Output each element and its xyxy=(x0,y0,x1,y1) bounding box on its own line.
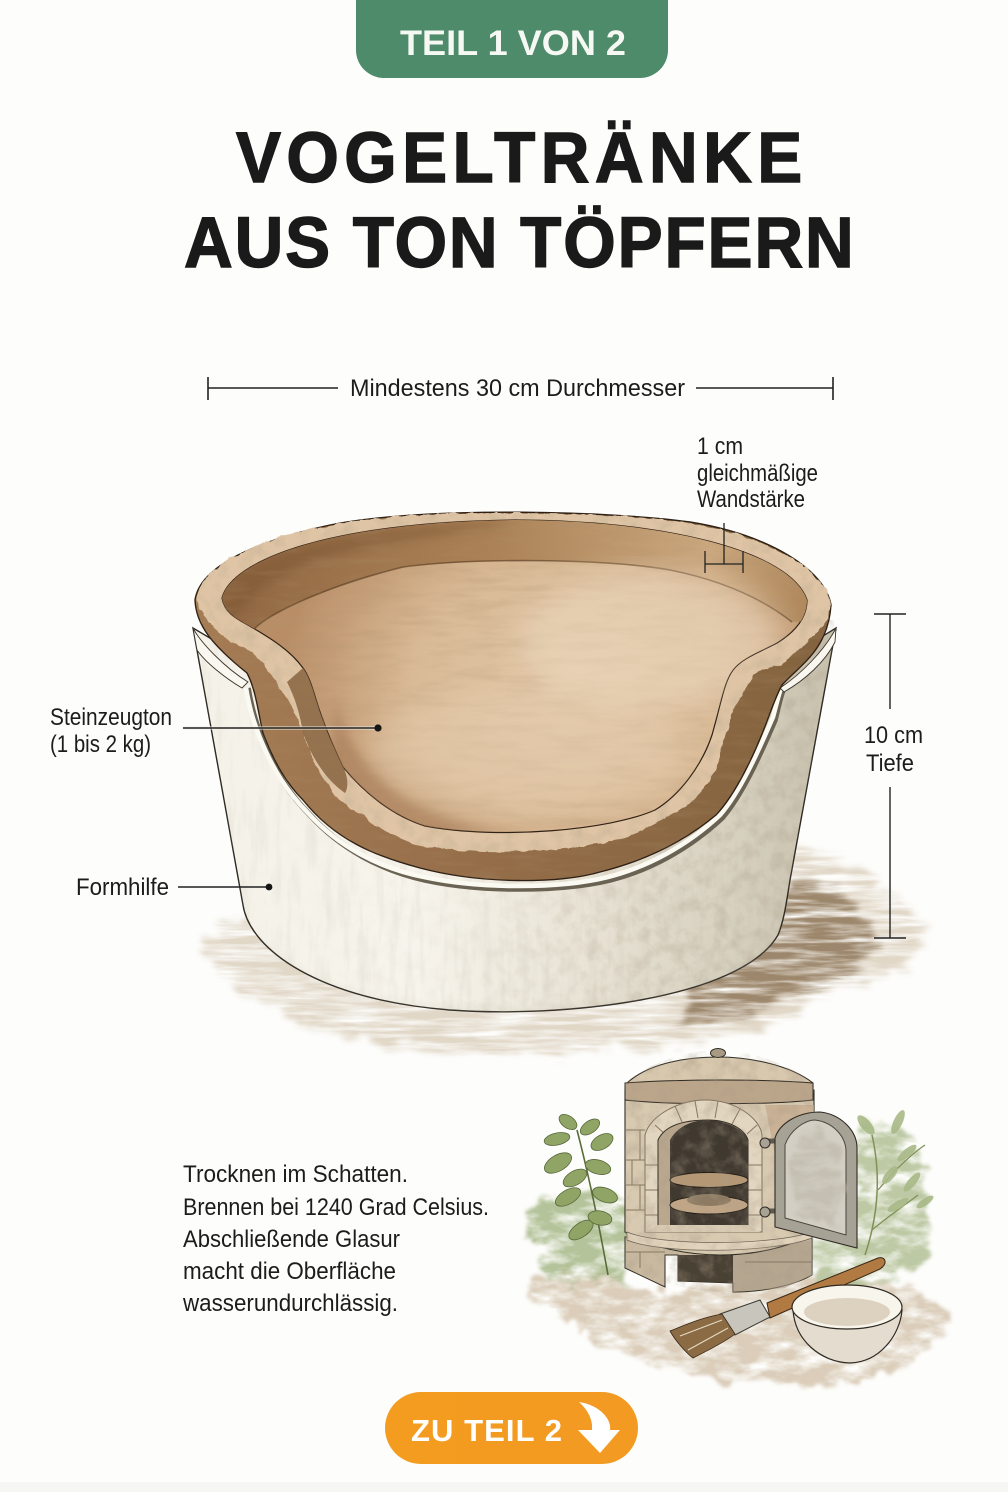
kiln texture xyxy=(620,1050,818,1295)
label: wall thickness xyxy=(697,433,818,573)
label: mould xyxy=(76,874,272,901)
kiln arch xyxy=(645,1100,762,1232)
header tab: part indicator: TEIL 1 VON 2 xyxy=(400,24,626,63)
label: wall thickness: Wandstärke xyxy=(697,486,805,513)
ground shadow under mould xyxy=(200,848,925,1053)
clay outer wall xyxy=(195,512,831,881)
ground wash xyxy=(522,1272,950,1385)
clay interior xyxy=(222,520,807,833)
depth dimension xyxy=(864,614,923,938)
mould (Formhilfe) xyxy=(190,620,840,1022)
label: wall thickness: 1 cm xyxy=(697,433,743,460)
title xyxy=(184,117,854,282)
green wash xyxy=(520,1190,630,1285)
body text: Abschließende Glasur xyxy=(183,1226,400,1253)
header tab: part indicator xyxy=(356,0,668,78)
title: VOGELTRÄNKE xyxy=(236,117,802,197)
depth dimension: 10 cm xyxy=(864,722,923,749)
depth dimension: Tiefe xyxy=(866,750,914,777)
title: AUS TON TÖPFERN xyxy=(184,202,854,282)
body text: Trocknen im Schatten. xyxy=(183,1161,408,1188)
interior upper wall xyxy=(210,515,820,630)
body text: macht die Oberfläche xyxy=(183,1258,396,1285)
kiln hinges xyxy=(762,1141,775,1211)
left plant xyxy=(541,1111,620,1275)
kiln body xyxy=(625,1090,814,1255)
button: to part 2 xyxy=(385,1392,638,1464)
diameter dimension: Mindestens 30 cm Durchmesser xyxy=(350,375,685,402)
kiln shelves xyxy=(670,1172,748,1188)
clay rim and cut edge xyxy=(196,513,831,852)
label: mould: Formhilfe xyxy=(76,874,169,901)
clay bowl (Steinzeugton) xyxy=(190,505,840,890)
label: clay: (1 bis 2 kg) xyxy=(50,731,151,758)
diameter dimension xyxy=(208,375,833,402)
body text xyxy=(182,1161,489,1317)
right plant xyxy=(854,1108,935,1255)
kiln dome xyxy=(625,1057,813,1102)
kiln base xyxy=(625,1237,812,1292)
clay cut face xyxy=(287,668,347,793)
brush xyxy=(670,1258,885,1358)
body text: Brennen bei 1240 Grad Celsius. xyxy=(183,1194,489,1221)
illustration: kiln, plants, brush and bowl xyxy=(520,1048,950,1385)
label: clay xyxy=(50,704,382,758)
label: wall thickness: gleichmäßige xyxy=(697,460,818,487)
glaze bowl xyxy=(792,1285,902,1363)
icon: curved arrow xyxy=(578,1402,620,1453)
body text: wasserundurchlässig. xyxy=(182,1290,398,1317)
mould inner lip xyxy=(248,688,783,889)
button: to part 2: ZU TEIL 2 xyxy=(411,1413,562,1448)
label: clay: Steinzeugton xyxy=(50,704,172,731)
kiln door xyxy=(775,1112,857,1248)
